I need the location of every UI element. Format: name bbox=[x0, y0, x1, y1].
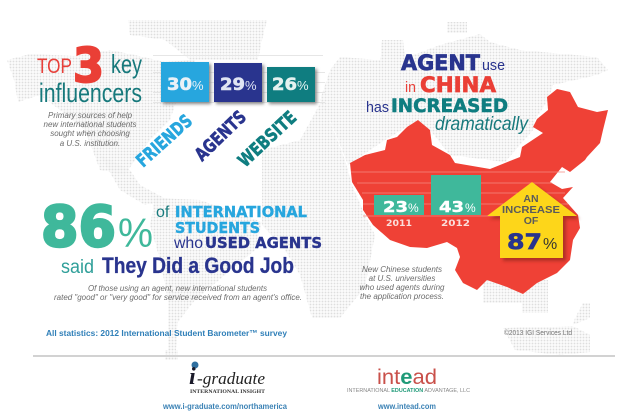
text: agent service note bbox=[54, 284, 302, 302]
bar: friends 30%: FRIENDS bbox=[132, 111, 197, 172]
bar: 2012 43%: % bbox=[465, 201, 476, 215]
text: new Chinese students note: who used agents during bbox=[360, 283, 445, 292]
stat: 86% bbox=[41, 195, 153, 260]
text: copyright: ©2013 IGI Services Ltd bbox=[504, 329, 572, 337]
heading: agent use in China: INCREASED bbox=[391, 95, 508, 117]
heading: top 3 key influencers: influencers bbox=[39, 78, 142, 108]
bar: 2011 23%: % bbox=[408, 201, 419, 215]
text: agent service note: Of those using an agent, new international students bbox=[88, 284, 267, 293]
logo: i-graduate: -graduate bbox=[197, 369, 265, 388]
logo: intead: INTERNATIONAL EDUCATION ADVANTAGE, LLC bbox=[347, 388, 470, 394]
bar: 2012 43% bbox=[431, 175, 481, 229]
panel: top 3 key influencers bbox=[37, 39, 325, 172]
link: intead url: www.intead.com bbox=[377, 401, 436, 411]
text: new Chinese students note: at U.S. universities bbox=[369, 274, 435, 283]
arrow: an increase of 87%: % bbox=[543, 236, 557, 253]
bar: 2012 43%: 43 bbox=[439, 198, 464, 216]
bar: website 26%: 26 bbox=[272, 75, 297, 95]
bar: 2012 43%: 2012 bbox=[441, 219, 470, 229]
text: primary sources note: Primary sources of help bbox=[48, 111, 133, 120]
bar: agents 29% bbox=[191, 63, 264, 166]
heading: international students who used agents: of bbox=[156, 204, 170, 221]
stat: 86%: 86 bbox=[41, 195, 116, 260]
text: new Chinese students note: the application process. bbox=[360, 292, 444, 301]
bar: 2011 23%: 2011 bbox=[386, 219, 412, 229]
heading: international students who used agents bbox=[156, 203, 322, 252]
bar: agents 29%: % bbox=[245, 78, 257, 93]
heading: agent use in China: use bbox=[482, 57, 505, 74]
heading: top 3 key influencers: key bbox=[111, 49, 142, 79]
logo: i-graduate: INTERNATIONAL INSIGHT bbox=[190, 389, 265, 395]
heading: agent use in China: in bbox=[405, 79, 416, 96]
text: new Chinese students note: New Chinese students bbox=[362, 265, 442, 274]
arrow: an increase of 87%: 87 bbox=[507, 230, 542, 254]
bar: 2011 23% bbox=[374, 195, 424, 229]
heading: said they did a good job: said bbox=[61, 257, 94, 278]
heading: agent use in China: has bbox=[366, 99, 389, 116]
heading: international students who used agents: who bbox=[173, 235, 203, 252]
logo: intead bbox=[347, 366, 470, 394]
bar: website 26%: % bbox=[297, 78, 309, 93]
arrow: an increase of 87%: AN bbox=[523, 193, 539, 205]
heading: agent use in China: AGENT bbox=[401, 51, 481, 75]
bar: website 26%: WEBSITE bbox=[234, 107, 301, 172]
bar: friends 30% bbox=[132, 62, 211, 172]
bar: 2011 23%: 23 bbox=[383, 198, 408, 216]
bar: agents 29%: AGENTS bbox=[191, 107, 251, 166]
bar: friends 30%: % bbox=[192, 78, 204, 93]
map: China bbox=[350, 89, 608, 294]
text: primary sources note: sought when choosing bbox=[50, 129, 130, 138]
bar: friends 30%: 30 bbox=[167, 75, 192, 95]
logo: i-graduate bbox=[189, 362, 265, 395]
heading: said they did a good job: They Did a Good Job bbox=[102, 253, 294, 278]
text: primary sources note: a U.S. institution. bbox=[60, 139, 120, 148]
stat: 86%: % bbox=[118, 210, 153, 256]
heading: agent use in China bbox=[366, 51, 529, 135]
bar: agents 29%: 29 bbox=[220, 75, 245, 95]
text: new Chinese students note bbox=[360, 265, 445, 301]
arrow: an increase of 87% bbox=[487, 182, 580, 261]
arrow: an increase of 87%: INCREASE bbox=[502, 204, 560, 216]
text: source statistics: All statistics: 2012 International Student Barometer™ survey bbox=[46, 328, 287, 338]
logo: i-graduate: i bbox=[189, 364, 196, 390]
text: agent service note: rated "good" or "very good" for service received from an agent's office. bbox=[54, 293, 302, 302]
heading: agent use in China: CHINA bbox=[420, 73, 497, 97]
heading: top 3 key influencers bbox=[37, 39, 142, 108]
panel: agent use in China bbox=[350, 51, 608, 301]
heading: international students who used agents: STUDENTS bbox=[175, 219, 260, 237]
panel: 86% used agents bbox=[41, 195, 322, 302]
arrow: an increase of 87%: OF bbox=[524, 215, 539, 227]
dotted world map background bbox=[7, 20, 608, 360]
link: i-graduate url: www.i-graduate.com/northamerica bbox=[162, 401, 287, 411]
heading: top 3 key influencers: 3 bbox=[73, 39, 104, 94]
text: primary sources note: new international students bbox=[44, 120, 136, 129]
heading: agent use in China: dramatically bbox=[435, 114, 529, 135]
text: primary sources note bbox=[44, 111, 136, 148]
heading: international students who used agents: USED AGENTS bbox=[205, 234, 322, 252]
logo: intead: intead bbox=[377, 366, 437, 389]
heading: international students who used agents: INTERNATIONAL bbox=[175, 203, 307, 221]
heading: top 3 key influencers: TOP bbox=[37, 55, 72, 78]
